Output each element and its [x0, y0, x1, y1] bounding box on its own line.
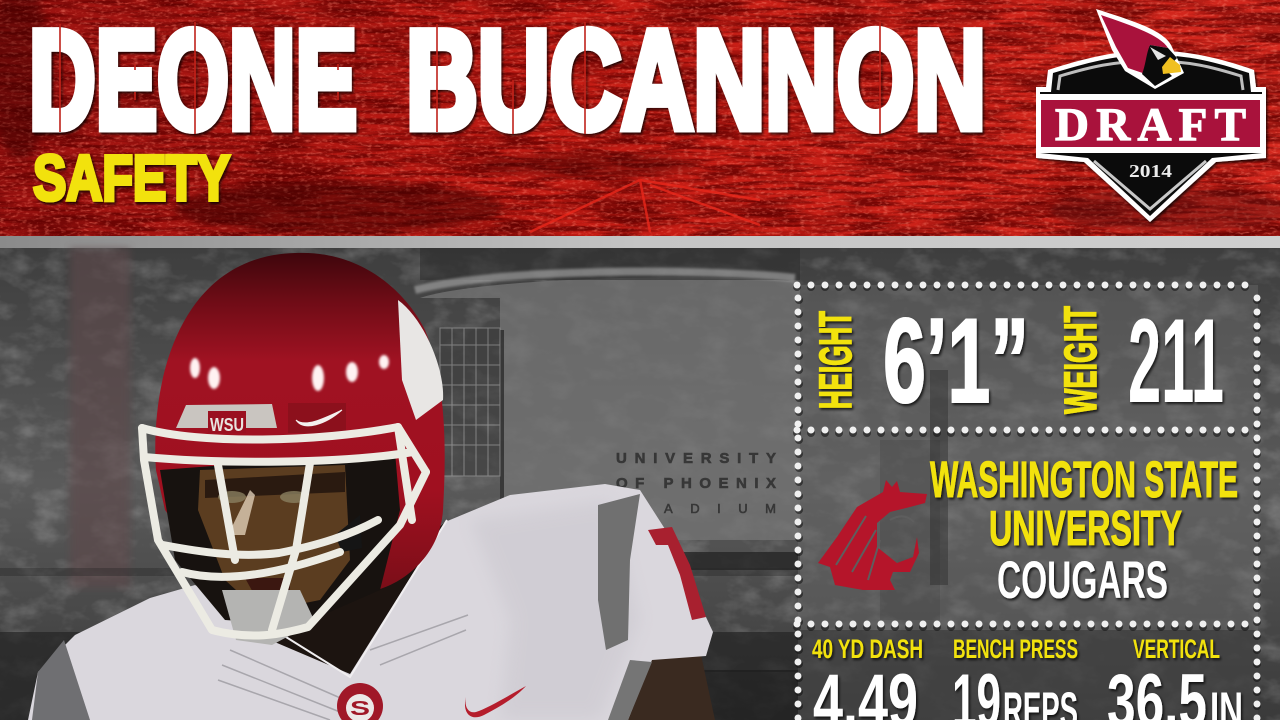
grey divider strip	[0, 236, 1280, 248]
face skin	[198, 465, 350, 612]
school name: COUGARS	[997, 551, 1168, 610]
player photo illustration: WSU	[210, 415, 244, 435]
shoulder stripe left	[32, 640, 90, 720]
burgundy band	[1041, 100, 1260, 147]
helmet visor clip	[176, 404, 277, 428]
stadium wall panel	[420, 277, 800, 540]
header banner: red scratched texture	[0, 0, 1280, 236]
jersey shading	[470, 500, 640, 720]
stat: height	[810, 294, 1029, 428]
weight label: WEIGHT	[1055, 306, 1106, 414]
stats panel background	[798, 285, 1258, 720]
logo: Cardinals 2014 draft shield	[1036, 9, 1266, 222]
height label: HEIGHT	[810, 311, 861, 409]
combine labels: BENCH PRESS	[953, 634, 1078, 664]
stadium lettering: OF PHOENIX	[616, 475, 776, 492]
facemask	[142, 427, 426, 636]
title: player name: DEONE	[29, 1, 357, 158]
studded frame around stats	[797, 285, 1259, 720]
combine values	[813, 659, 1243, 720]
jersey WSU patch: S	[350, 698, 370, 720]
year: 2014	[1129, 161, 1172, 181]
collar lines	[218, 615, 468, 720]
stadium lettering	[616, 450, 776, 516]
sleeve stripe	[598, 494, 640, 650]
combine labels	[812, 634, 1220, 664]
jersey	[28, 484, 713, 720]
lower side stripe	[608, 660, 652, 720]
left reddish column	[70, 248, 130, 588]
chin guard	[222, 590, 315, 645]
school name: UNIVERSITY	[989, 502, 1182, 556]
helmet side logo	[398, 300, 443, 420]
grid window	[440, 328, 500, 476]
helmet nike patch	[288, 403, 346, 433]
height value: 6’1”	[883, 294, 1029, 428]
helmet highlights	[190, 355, 389, 391]
subtitle: position: SAFETY	[33, 142, 230, 214]
white band	[1038, 94, 1264, 153]
chin strap	[335, 515, 362, 552]
shield black body	[1040, 55, 1262, 216]
background: stadium in greyscale	[0, 248, 1280, 720]
combine labels: VERTICAL	[1133, 634, 1220, 664]
title: player name: BUCANNON	[406, 1, 986, 158]
jersey WSU patch	[337, 683, 383, 720]
player photo illustration	[28, 253, 715, 720]
stadium lettering: ADIUM	[664, 501, 776, 516]
neck opening	[270, 522, 445, 674]
sleeve number	[648, 527, 706, 620]
cardinal head	[1096, 9, 1184, 89]
visor and face	[160, 452, 400, 625]
combine labels: 40 YD DASH	[812, 634, 923, 664]
stat: weight	[1055, 294, 1224, 428]
icon: WSU cougar logo	[818, 480, 927, 590]
school name	[930, 451, 1238, 610]
title: player name	[29, 1, 986, 158]
helmet shell	[155, 253, 445, 592]
DRAFT wordmark: DRAFT	[1055, 99, 1246, 151]
arm	[625, 650, 715, 720]
jersey nike swoosh	[465, 686, 526, 717]
lower stadium bands	[0, 568, 800, 576]
stadium lettering: UNIVERSITY	[616, 450, 776, 467]
shield outline	[1036, 50, 1266, 222]
